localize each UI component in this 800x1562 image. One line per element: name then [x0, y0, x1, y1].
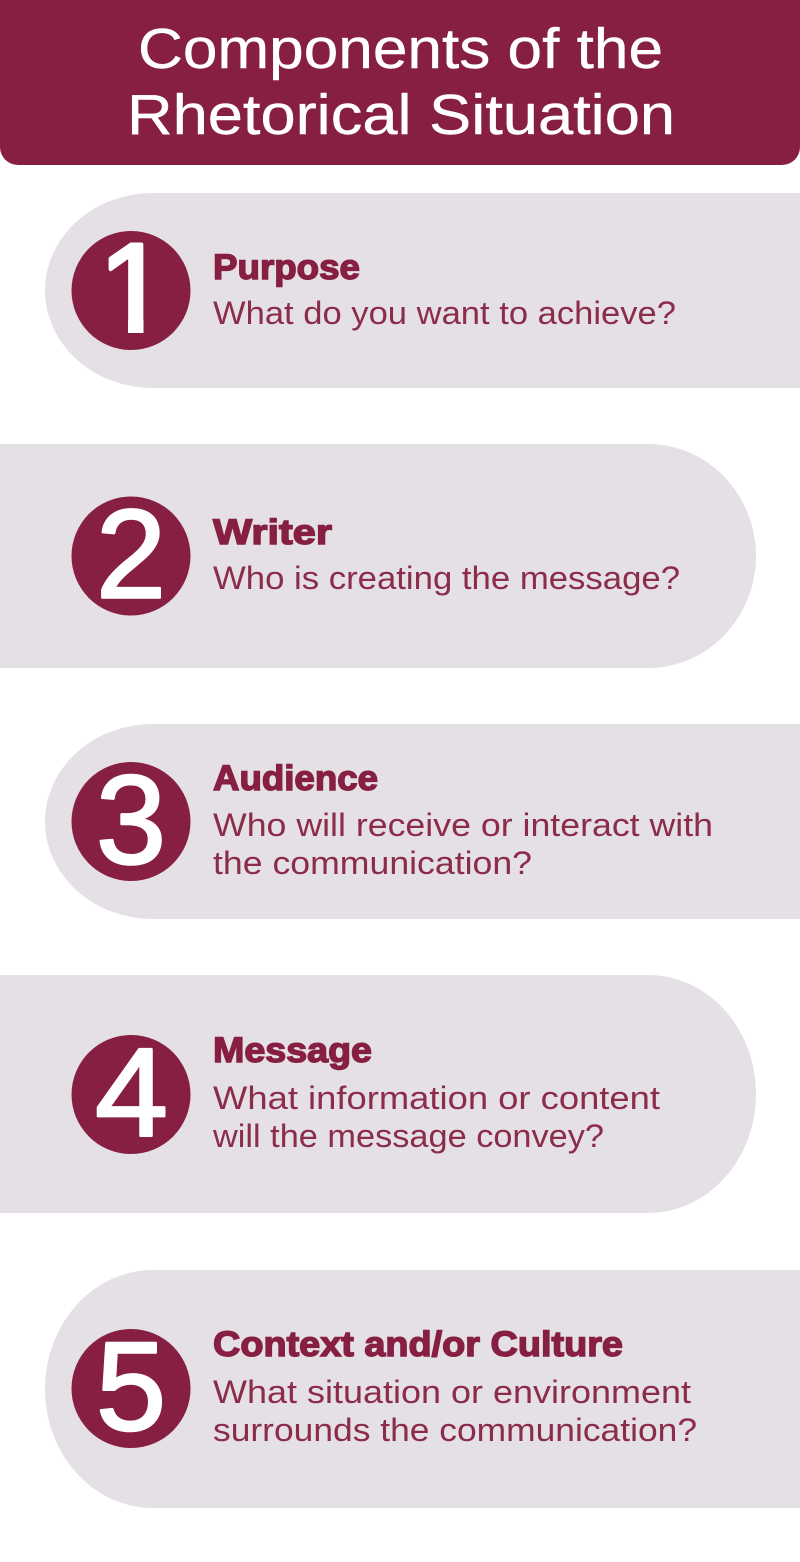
icon: number 4: [72, 1022, 190, 1163]
panel: context and culture: [45, 1270, 800, 1508]
purpose text: Purpose: [213, 248, 360, 287]
context and culture text: surrounds the communication?: [213, 1412, 697, 1448]
message text: [212, 1031, 660, 1154]
context and culture text: [213, 1325, 697, 1448]
title: Rhetorical Situation: [127, 83, 675, 147]
writer text: [213, 513, 680, 596]
panel: purpose: [45, 193, 800, 388]
message text: Message: [213, 1031, 372, 1070]
context and culture text: What situation or environment: [213, 1374, 691, 1410]
purpose text: [213, 248, 676, 331]
context and culture text: Context and/or Culture: [213, 1325, 623, 1364]
icon: number 5: [72, 1316, 190, 1457]
audience text: Who will receive or interact with: [213, 807, 713, 843]
icon: number 3: 3: [96, 750, 166, 890]
writer text: Who is creating the message?: [213, 560, 680, 596]
panel: writer: [0, 444, 756, 668]
message text: What information or content: [213, 1080, 660, 1116]
icon: number 1: 1: [98, 218, 169, 358]
panel: message: [0, 975, 756, 1213]
writer text: Writer: [213, 513, 332, 552]
title: [127, 17, 675, 147]
audience text: the communication?: [213, 845, 532, 881]
purpose text: What do you want to achieve?: [213, 295, 676, 331]
title: Components of the: [138, 17, 663, 81]
panel: audience: [45, 724, 800, 919]
icon: number 3: [72, 750, 190, 890]
icon: number 2: 2: [96, 484, 166, 624]
message text: will the message convey?: [212, 1118, 604, 1154]
icon: number 2: [72, 484, 190, 624]
icon: number 4: 4: [95, 1022, 168, 1163]
title banner: [0, 0, 800, 165]
audience text: Audience: [213, 759, 378, 798]
icon: number 5: 5: [96, 1316, 166, 1457]
icon: number 1: [72, 231, 190, 350]
audience text: [213, 759, 713, 881]
